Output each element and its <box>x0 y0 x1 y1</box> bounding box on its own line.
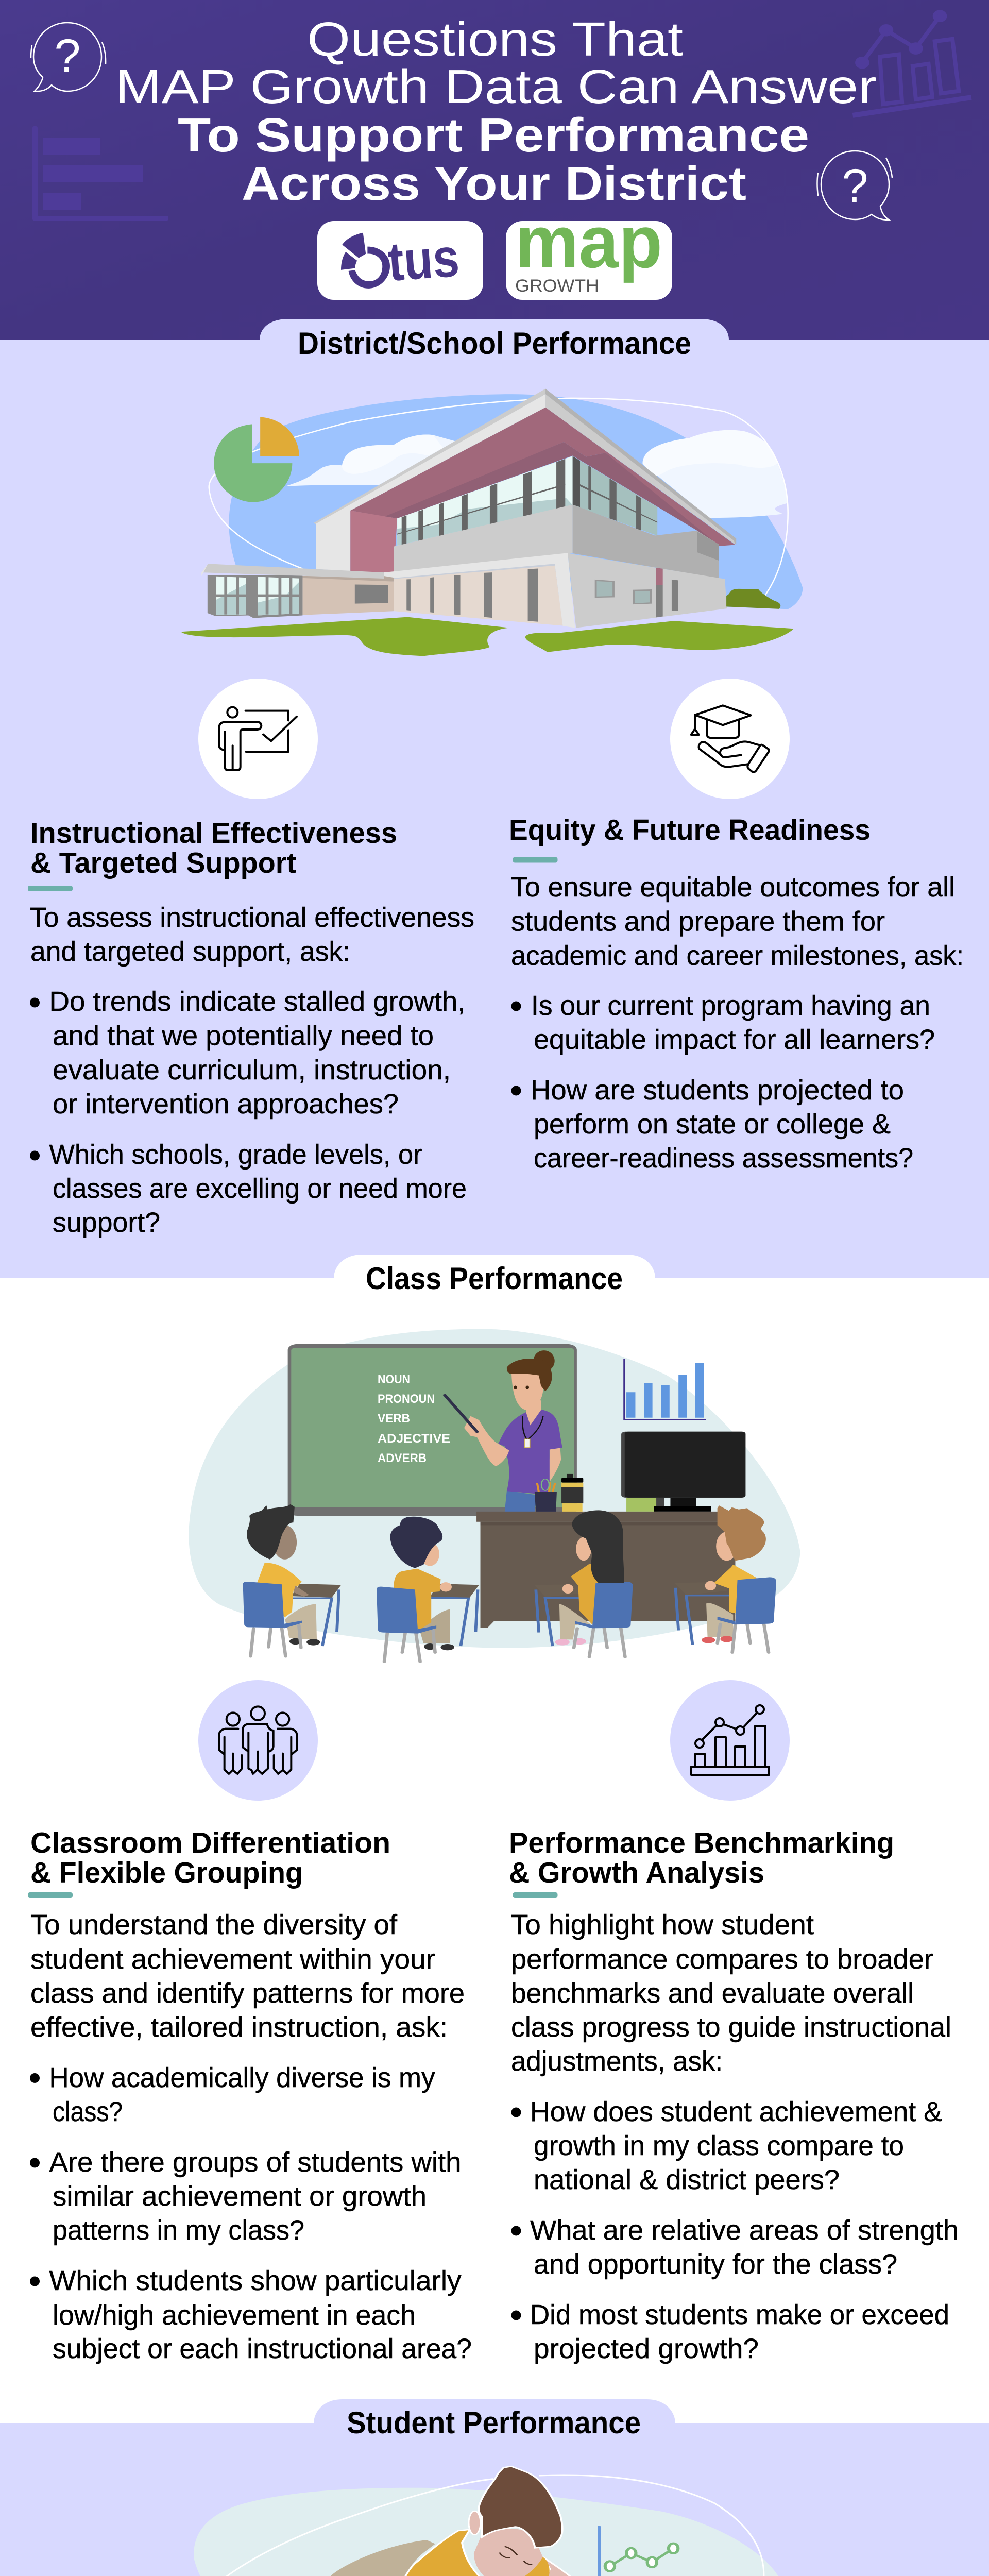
chair <box>330 2540 435 2576</box>
chalkboard words: ADVERB <box>378 1451 427 1465</box>
illustration: student writing <box>193 2466 786 2576</box>
chalkboard words <box>378 1372 450 1465</box>
decoration: line chart background <box>853 12 971 115</box>
title: Questions That <box>307 12 683 66</box>
bar chart <box>624 1359 706 1419</box>
bullet list: How does student achievement & <box>530 2096 942 2127</box>
desk and supplies <box>476 1474 735 1628</box>
chalkboard words: VERB <box>378 1412 410 1426</box>
title: MAP Growth Data Can Answer <box>115 60 877 113</box>
bullet list: evaluate curriculum, instruction, <box>53 1055 451 1086</box>
bullet list: classes are excelling or need more <box>53 1173 467 1204</box>
bullet list: Is our current program having an <box>531 990 930 1021</box>
title: Across Your District <box>242 157 746 210</box>
chalkboard <box>288 1344 577 1516</box>
monitor <box>621 1432 745 1512</box>
heading: & Targeted Support <box>30 846 296 879</box>
panel: student performance <box>0 2399 989 2576</box>
chalkboard words: ADJECTIVE <box>378 1432 450 1446</box>
bullet list: and that we potentially need to <box>53 1020 434 1051</box>
illustration: school building <box>181 388 803 656</box>
bullet list <box>511 2096 959 2364</box>
bullet list: patterns in my class? <box>53 2215 304 2246</box>
logo: Otus <box>317 221 483 300</box>
title: To Support Performance <box>178 108 809 162</box>
heading: & Growth Analysis <box>509 1856 764 1889</box>
intro text: To ensure equitable outcomes for all <box>511 872 955 903</box>
intro text <box>30 902 474 967</box>
background blob <box>189 1329 800 1648</box>
student 4 <box>675 1505 776 1653</box>
bullet list: growth in my class compare to <box>534 2130 904 2161</box>
text block: instructional effectiveness <box>28 817 474 1238</box>
bullet list <box>30 986 467 1238</box>
bullet list: projected growth? <box>534 2333 759 2364</box>
line chart <box>599 2527 679 2576</box>
intro text <box>511 872 964 971</box>
bullet list: Which students show particularly <box>49 2265 462 2296</box>
icon: instructor at board <box>198 679 318 799</box>
bullet list: How are students projected to <box>531 1075 904 1106</box>
bullet list: equitable impact for all learners? <box>534 1024 935 1055</box>
bullet list: low/high achievement in each <box>53 2300 416 2331</box>
icon: growth chart <box>670 1680 790 1801</box>
teacher <box>444 1350 562 1512</box>
intro text: student achievement within your <box>30 1944 435 1975</box>
heading: Classroom Differentiation <box>30 1826 390 1859</box>
intro text: academic and career milestones, ask: <box>511 940 964 971</box>
logo: Otus: tus <box>386 227 461 293</box>
section heading: District/School Performance: District/School Performance <box>298 326 691 361</box>
logo: MAP Growth: GROWTH <box>515 276 599 296</box>
intro text: To assess instructional effectiveness <box>30 902 474 933</box>
icon: question bubble right <box>817 151 892 220</box>
intro text: class and identify patterns for more <box>30 1978 465 2009</box>
bullet list: Do trends indicate stalled growth, <box>49 986 466 1017</box>
decoration: bar chart background <box>32 126 168 221</box>
heading: Equity & Future Readiness <box>509 814 871 846</box>
heading <box>28 1826 390 1898</box>
intro text: performance compares to broader <box>511 1944 933 1975</box>
intro text <box>30 1909 465 2043</box>
bullet list: or intervention approaches? <box>53 1089 399 1120</box>
intro text: effective, tailored instruction, ask: <box>30 2012 448 2043</box>
bullet list: Did most students make or exceed <box>530 2299 949 2330</box>
bullet list: Which schools, grade levels, or <box>49 1139 422 1170</box>
bullet list: What are relative areas of strength <box>530 2215 959 2246</box>
chalkboard words: PRONOUN <box>378 1392 435 1406</box>
student 3 <box>535 1510 633 1657</box>
bullet list: national & district peers? <box>534 2164 840 2195</box>
intro text: benchmarks and evaluate overall <box>511 1978 914 2009</box>
intro text: To understand the diversity of <box>30 1909 398 1940</box>
text block: performance benchmarking <box>509 1826 959 2364</box>
heading: Performance Benchmarking <box>509 1826 894 1859</box>
bullet list: and opportunity for the class? <box>534 2249 897 2280</box>
heading: Instructional Effectiveness <box>30 817 397 850</box>
bullet list <box>30 2062 472 2364</box>
bullet list: similar achievement or growth <box>53 2181 427 2212</box>
heading <box>509 1826 894 1898</box>
bullet list: How academically diverse is my <box>49 2062 435 2093</box>
intro text <box>511 1909 951 2077</box>
student body <box>366 2466 592 2576</box>
intro text: students and prepare them for <box>511 906 885 937</box>
bullet list <box>511 990 935 1174</box>
bullet list: Are there groups of students with <box>49 2147 461 2178</box>
student 1 <box>243 1504 341 1657</box>
icon: question bubble left: ? <box>54 30 81 82</box>
bullet list: support? <box>53 1207 160 1238</box>
panel: district/school performance <box>0 319 989 1278</box>
logo: MAP Growth: map <box>515 200 662 283</box>
text block: classroom differentiation <box>28 1826 472 2364</box>
heading: & Flexible Grouping <box>30 1856 303 1889</box>
panel: header <box>0 0 989 341</box>
icon: question bubble right: ? <box>842 160 868 212</box>
icon: question bubble left <box>31 23 106 91</box>
text block: equity and future readiness <box>509 814 964 1174</box>
heading <box>28 817 397 891</box>
bullet list: subject or each instructional area? <box>53 2333 472 2364</box>
icon: graduation cap in hand <box>670 679 790 799</box>
intro text: and targeted support, ask: <box>30 936 350 967</box>
title <box>115 12 877 210</box>
heading <box>509 814 871 862</box>
student 2 <box>377 1517 479 1662</box>
bullet list: career-readiness assessments? <box>534 1143 913 1174</box>
bullet list: perform on state or college & <box>534 1109 891 1140</box>
panel: class performance <box>0 1255 989 2423</box>
intro text: class progress to guide instructional <box>511 2012 951 2043</box>
illustration: classroom <box>189 1329 800 1662</box>
intro text: To highlight how student <box>511 1909 814 1940</box>
intro text: adjustments, ask: <box>511 2046 723 2077</box>
icon: group of students <box>198 1680 318 1801</box>
bullet list: class? <box>53 2096 123 2127</box>
section heading: Student Performance: Student Performance <box>347 2405 641 2440</box>
chalkboard words: NOUN <box>378 1372 410 1386</box>
section heading: Class Performance: Class Performance <box>366 1261 623 1296</box>
